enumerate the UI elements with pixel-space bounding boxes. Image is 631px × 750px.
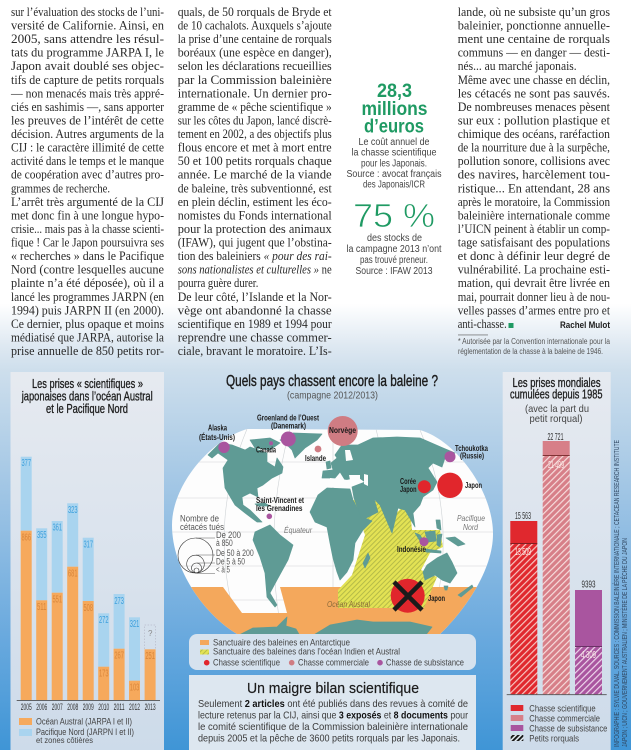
- article text column 3: De nombreuses menaces pèsent: [458, 100, 610, 114]
- article text column 3: de la nourriture due à la surpêche,: [458, 141, 610, 155]
- article text column 3: mation, qui devrait être livrée en: [458, 276, 611, 290]
- article text column 2: (IFAW), qui jugent que l’obstina-: [178, 236, 332, 250]
- panel: scientific results: [189, 675, 476, 750]
- heading: [21, 376, 153, 416]
- article text column 2: boréaux (une espèce en danger),: [178, 46, 332, 60]
- article text column 1: tats du programme JARPA I, le: [11, 46, 164, 60]
- bar chart: 21 499: [548, 460, 564, 471]
- panel body: Seulement 2 articles ont été publiés dans des revues à comité de: [198, 698, 468, 710]
- chart legend: [19, 716, 134, 745]
- article text column 1: fique ! Car le Japon poursuivra ses: [11, 236, 164, 250]
- article text column 2: ciale, bravant le moratoire. L’Is-: [178, 344, 332, 358]
- panel body: lecture retenus par la CIJ, ainsi que 3 exposés et 8 documents pour: [198, 710, 468, 722]
- article text column 1: 1994) puis JARPN II (en 2000).: [11, 303, 164, 317]
- caption: coût annuel: Le coût annuel de: [358, 137, 430, 148]
- chart legend: Chasse scientifique: [529, 704, 596, 714]
- size legend: De 5 à 50: [216, 556, 245, 566]
- bar chart: 321: [130, 619, 140, 630]
- article text column 2: pour la protection des animaux: [178, 222, 332, 236]
- article text column 2: tement en 2002, a des objectifs plus: [178, 127, 332, 141]
- panel body: le comité scientifique de la Commission baleinière internationale: [198, 721, 468, 733]
- article text column 3: et donc à définir leur degré de: [458, 249, 610, 263]
- heading: japonaises dans l’océan Austral: [21, 388, 153, 404]
- credits, rotated: INFOGRAPHIE : SYLVIE DUVAL. SOURCES : COMMISSION BALEINIÈRE INTERNATIONALE ; CETACEAN RESEARCH INSTITUTE: [612, 440, 621, 747]
- size legend: De 50 à 200: [216, 548, 254, 558]
- article text column 2: sons nationalistes et culturelles » ne: [178, 263, 332, 277]
- chart legend: et zones côtières: [36, 735, 93, 745]
- ocean labels: Pacifique: [457, 513, 485, 523]
- ocean labels: Océan Austral: [327, 599, 371, 609]
- ocean labels: Nord: [463, 522, 478, 532]
- size legend: [178, 514, 254, 574]
- bar chart: 15 563: [515, 511, 531, 522]
- map legend: Chasse de subsistance: [386, 658, 464, 668]
- bar chart: 2012: [129, 702, 140, 712]
- article text column 2: la prise d’une centaine de rorquals: [178, 32, 332, 46]
- article text column 2: de 10 cachalots. Auxquels s’ajoute: [178, 19, 332, 33]
- panel body: depuis 2005 et la pêche de 3600 petits rorquals par les Japonais.: [198, 733, 460, 745]
- article text column 3: pollution sonore, collisions avec: [458, 154, 610, 168]
- article text column 1: crisie... mais pas à la chasse scienti-: [11, 222, 164, 236]
- footnote: [458, 335, 610, 356]
- map legend: Chasse commerciale: [298, 658, 369, 668]
- article text column 1: — non menacés mais très appré-: [10, 86, 164, 100]
- map title: [226, 373, 438, 402]
- caption: stocks: des stocks de: [367, 233, 422, 244]
- heading: [510, 376, 603, 425]
- article text column 2: tion des baleiniers « pour des rai-: [178, 249, 332, 263]
- article text column 3: baleinier, ponctionne annuelle-: [458, 19, 610, 33]
- bar chart: 2010: [98, 702, 109, 712]
- figure: 28,3 millions d'euros: [362, 81, 428, 138]
- bar chart: 508: [84, 603, 93, 614]
- bar chart: 22 721: [548, 432, 564, 443]
- article text column 3: tage satisfaisant des populations: [458, 236, 610, 250]
- bar chart: 2007: [52, 702, 63, 712]
- size legend: cétacés tués: [180, 522, 224, 532]
- article text column 2: 50 et 100 petits rorquals chaque: [178, 154, 332, 168]
- bar chart: 13 509: [515, 547, 531, 558]
- chart legend: [511, 704, 607, 744]
- map subtitle: (campagne 2012/2013): [287, 390, 378, 402]
- article text column 3: nés... au marché japonais.: [458, 59, 577, 73]
- hunting circles: [218, 416, 463, 613]
- map legend: [189, 634, 476, 670]
- article text column 2: internationale. Un dernier pro-: [178, 86, 332, 100]
- footnote: réglementation de la chasse à la baleine de 1946.: [458, 347, 603, 356]
- chart legend: Chasse de subsistance: [529, 724, 607, 734]
- article text column 2: De leur côté, l’Islande et la Nor-: [178, 290, 332, 304]
- bar chart: [17, 457, 160, 712]
- chart legend: Pacifique Nord (JARPN I et II): [36, 727, 134, 737]
- bar chart: 355: [37, 530, 47, 541]
- article text column 3: mai, pourrait donner lieu à de nou-: [458, 290, 610, 304]
- caption: coût annuel: Source : avocat français: [346, 169, 442, 180]
- bar chart: 2006: [36, 702, 47, 712]
- callout: key figures: [346, 81, 442, 277]
- article text column 2: reprendre une chasse commer-: [178, 330, 332, 344]
- bar chart: 267: [114, 650, 124, 662]
- article text column 3: chimique des océans, raréfaction: [458, 127, 611, 141]
- article text column 1: L’arrêt très argumenté de la CIJ: [11, 195, 164, 209]
- country labels: Canada: [256, 446, 276, 454]
- country labels: Groenland de l’Ouest: [257, 414, 319, 423]
- country labels: Norvège: [329, 426, 356, 435]
- country labels: Saint-Vincent et: [256, 496, 304, 505]
- country labels: Tchoukotka: [455, 444, 488, 453]
- article text column 1: « recherches » dans le Pacifique: [11, 249, 164, 263]
- country labels: Corée: [400, 477, 416, 486]
- size legend: De 200: [216, 530, 241, 540]
- bar chart: 273: [114, 596, 124, 607]
- article text column 3: [458, 5, 611, 331]
- size legend: à 850: [216, 538, 233, 548]
- figure: 28,3 millions d'euros: d’euros: [364, 116, 424, 138]
- caption: stocks: pas trouvé preneur.: [360, 255, 428, 266]
- country labels: Indonésie: [397, 545, 426, 554]
- country labels: Japon: [428, 594, 445, 603]
- bar chart: 2005: [21, 702, 32, 712]
- bar chart: 2008: [67, 702, 78, 712]
- ocean labels: Équateur: [284, 525, 313, 535]
- chart legend: Chasse commerciale: [529, 714, 600, 724]
- country labels: (Danemark): [271, 422, 306, 431]
- article text column 1: sur l’évaluation des stocks de l’uni-: [11, 5, 164, 19]
- bar chart: 173: [99, 668, 109, 680]
- country labels: Japon: [400, 485, 417, 494]
- article text column 1: Japon avait doublé ses objec-: [11, 59, 164, 73]
- article text column 1: de coopération avec d’autres pro-: [11, 168, 164, 182]
- country labels: Islande: [305, 454, 326, 463]
- size legend: Nombre de: [180, 514, 219, 524]
- bar chart: 551: [52, 594, 62, 606]
- article text column 3: les cétacés ne sont pas sauvés.: [458, 86, 610, 100]
- heading: Les prises mondiales: [512, 376, 600, 390]
- bar chart: 511: [37, 602, 47, 613]
- article text column 2: vège ont abandonné la chasse: [178, 303, 332, 317]
- figure: 75 %: 75 %: [353, 197, 435, 234]
- credits, rotated: [612, 440, 629, 747]
- article text column 3: après le moratoire, la Commission: [458, 195, 611, 209]
- map title: Quels pays chassent encore la baleine ?: [226, 373, 438, 390]
- article text column 2: gramme de « pêche scientifique »: [178, 100, 332, 114]
- article text column 1: activité dans le temps et le manque: [11, 154, 164, 168]
- bar chart: [507, 432, 607, 695]
- bar chart: 272: [99, 615, 109, 626]
- article text column 2: [178, 5, 332, 358]
- caption: stocks: [346, 233, 442, 277]
- inland seas: [330, 450, 368, 487]
- bar chart: 317: [84, 540, 93, 550]
- article text column 1: décision. Autres arguments de la: [11, 127, 164, 141]
- byline: Rachel Mulot: [560, 320, 611, 331]
- bar chart: 377: [22, 458, 31, 469]
- bar chart: 2013: [145, 702, 156, 712]
- map legend: Sanctuaire des baleines en Antarctique: [213, 638, 350, 648]
- country labels: les Grenadines: [256, 504, 303, 513]
- article text column 3: velles passes d’armes entre pro et: [458, 303, 610, 317]
- country labels: [199, 414, 488, 603]
- bar chart: 323: [68, 505, 78, 516]
- map legend: Sanctuaire des baleines dans l’océan Indien et Austral: [213, 646, 400, 658]
- bar chart: ?: [148, 629, 153, 638]
- caption: coût annuel: pour les Japonais.: [361, 158, 427, 170]
- size legend: < à 5: [216, 564, 230, 574]
- article text column 3: lande, où ne subsiste qu’un gros: [458, 5, 610, 19]
- caption: stocks: Source : IFAW 2013: [356, 266, 433, 277]
- article text column 3: l’UICN peinent à établir un comp-: [458, 222, 610, 236]
- country labels: Alaska: [208, 424, 227, 433]
- article text column 1: lancé les programmes JARPN (en: [11, 290, 165, 304]
- heading: Les prises « scientifiques »: [32, 376, 143, 391]
- article text column 3: vulnérabilité. La prochaine esti-: [458, 263, 610, 277]
- article text column 3: des navires, harcèlement tou-: [458, 168, 610, 182]
- article text column 1: met donc fin à une longue hypo-: [11, 208, 164, 222]
- article text column 1: 2005, sans attendre les résul-: [11, 32, 164, 46]
- panel body: [198, 698, 468, 745]
- figure: 28,3 millions d'euros: 28,3: [377, 81, 412, 102]
- article text column 3: Même avec une chasse en déclin,: [458, 73, 610, 87]
- bar chart: 2011: [114, 702, 125, 712]
- panel: cumulative catches: [503, 372, 611, 750]
- article text column 1: [10, 5, 165, 358]
- article text column 1: ciés en sashimis —, sans apporter: [11, 100, 165, 114]
- end mark: [508, 323, 514, 328]
- article text column 1: versité de Californie. Ainsi, en: [11, 19, 165, 33]
- caption: coût annuel: la chasse scientifique: [352, 148, 437, 158]
- article text column 1: CIJ : le caractère illimité de cette: [11, 141, 164, 155]
- bar chart: 361: [52, 522, 62, 534]
- article text column 2: année. Le marché de la viande: [178, 168, 332, 182]
- country labels: (États-Unis): [199, 433, 235, 442]
- country labels: Japon: [465, 481, 482, 490]
- article text column 2: flous encore et met à mort entre: [178, 141, 332, 155]
- article text column 2: quals, de 50 rorquals de Bryde et: [178, 5, 332, 19]
- article text column 1: Ce dernier, plus opaque et moins: [11, 317, 164, 331]
- credits, rotated: JAPON ; UICN ; GOUVERNEMENT AUSTRALIEN ; MINISTÈRE DE LA PÊCHE DU JAPON: [620, 538, 629, 747]
- caption: coût annuel: des Japonais/ICR: [363, 180, 425, 190]
- caption: coût annuel: [346, 137, 442, 190]
- article text column 2: scientifique en 1989 et 1994 pour: [178, 317, 332, 331]
- article text column 2: par la Commission baleinière: [178, 73, 332, 87]
- panel: Japanese catches: [10, 372, 164, 750]
- heading: et le Pacifique Nord: [46, 401, 128, 416]
- article text column 1: grammes de recherche.: [11, 181, 110, 195]
- bar chart: 4 309: [581, 650, 596, 661]
- Antarctic sanctuary: [191, 587, 477, 634]
- Indian Ocean sanctuary: [338, 497, 443, 608]
- continents: [208, 433, 473, 636]
- article text column 3: ristique... En attendant, 28 ans: [458, 181, 610, 195]
- map legend: Chasse scientifique: [213, 658, 280, 668]
- chart legend: Petits rorquals: [529, 734, 579, 744]
- article text column 1: médiatisé que JARPA, autorise la: [11, 330, 164, 344]
- article text column 1: Nord (contre lesquelles aucune: [11, 263, 164, 277]
- figure: 28,3 millions d'euros: millions: [362, 99, 428, 120]
- heading: petit rorqual): [530, 413, 582, 425]
- article text column 3: communs — en danger — desti-: [458, 46, 610, 60]
- article text column 2: pourra guère durer.: [178, 276, 258, 290]
- article text column 1: prise annuelle de 850 petits ror-: [11, 344, 164, 358]
- world map: [170, 414, 495, 640]
- article text column 1: tifs de capture de petits rorquals: [11, 73, 164, 87]
- caption: stocks: la campagne 2013 n’ont: [346, 244, 442, 255]
- article text column 1: plainte n’a été déposée), où il a: [11, 276, 164, 290]
- ocean labels: [284, 513, 485, 609]
- bar chart: 681: [68, 568, 78, 580]
- article text column 3: baleinière internationale comme: [458, 208, 610, 222]
- chart legend: Océan Austral (JARPA I et II): [36, 716, 132, 726]
- article text column 3: sur eux : pollution plastique et: [458, 114, 610, 128]
- article text column 2: de baleine, très subventionné, est: [178, 181, 332, 195]
- panel heading: Un maigre bilan scientifique: [247, 680, 419, 697]
- bar chart: 103: [130, 682, 140, 694]
- article text column 2: nomistes du Fonds international: [178, 208, 332, 222]
- article text column 2: sur les côtes du Japon, lancé discrè-: [178, 114, 332, 128]
- bar chart: 9393: [582, 580, 596, 590]
- country labels: (Russie): [460, 452, 484, 460]
- bar chart: 866: [22, 532, 31, 544]
- article text column 3: ment une centaine de rorquals: [458, 32, 610, 46]
- bar chart: 251: [145, 651, 155, 662]
- bar chart: 2009: [83, 702, 94, 712]
- article text column 2: en plein déclin, estiment les éco-: [178, 195, 332, 209]
- heading: (avec la part du: [525, 403, 589, 415]
- article text column 3: anti-chasse.: [458, 317, 507, 331]
- article text column 2: selon les déclarations recueillies: [178, 59, 332, 73]
- article text column 1: les preuves de l’intérêt de cette: [11, 114, 164, 128]
